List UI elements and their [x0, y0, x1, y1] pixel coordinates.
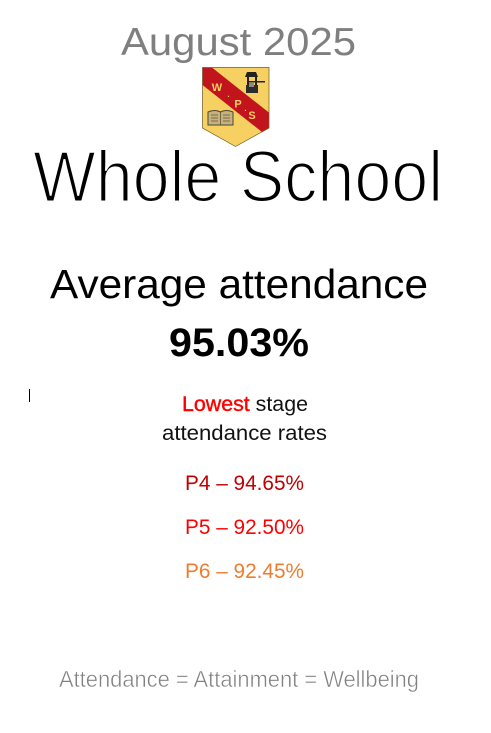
stat: P4: P4 – 94.65% — [185, 472, 304, 495]
subheading: lowest stage attendance rates: attendance rates — [162, 422, 327, 445]
stat: P5: P5 – 92.50% — [185, 516, 304, 539]
text cursor — [29, 389, 30, 402]
figure: average attendance value: 95.03% — [169, 321, 309, 365]
crest letters: . — [244, 104, 247, 113]
icon: school crest — [200, 66, 272, 146]
crest well — [245, 72, 265, 93]
heading: average attendance: Average attendance — [50, 261, 428, 307]
heading: month: August 2025 — [121, 21, 356, 64]
stat: P6: P6 – 92.45% — [185, 560, 304, 583]
crest letters: W — [212, 82, 223, 94]
crest book — [208, 110, 233, 125]
crest letters: P — [234, 98, 242, 110]
crest letters: S — [248, 110, 256, 122]
subheading: lowest stage attendance rates — [162, 393, 327, 445]
crest letters — [212, 82, 256, 122]
heading: whole school: Whole School — [33, 138, 443, 218]
footer slogan: Attendance = Attainment = Wellbeing — [59, 666, 419, 692]
subheading: lowest stage attendance rates: Lowest stage — [182, 393, 308, 416]
crest letters: . — [227, 90, 230, 99]
